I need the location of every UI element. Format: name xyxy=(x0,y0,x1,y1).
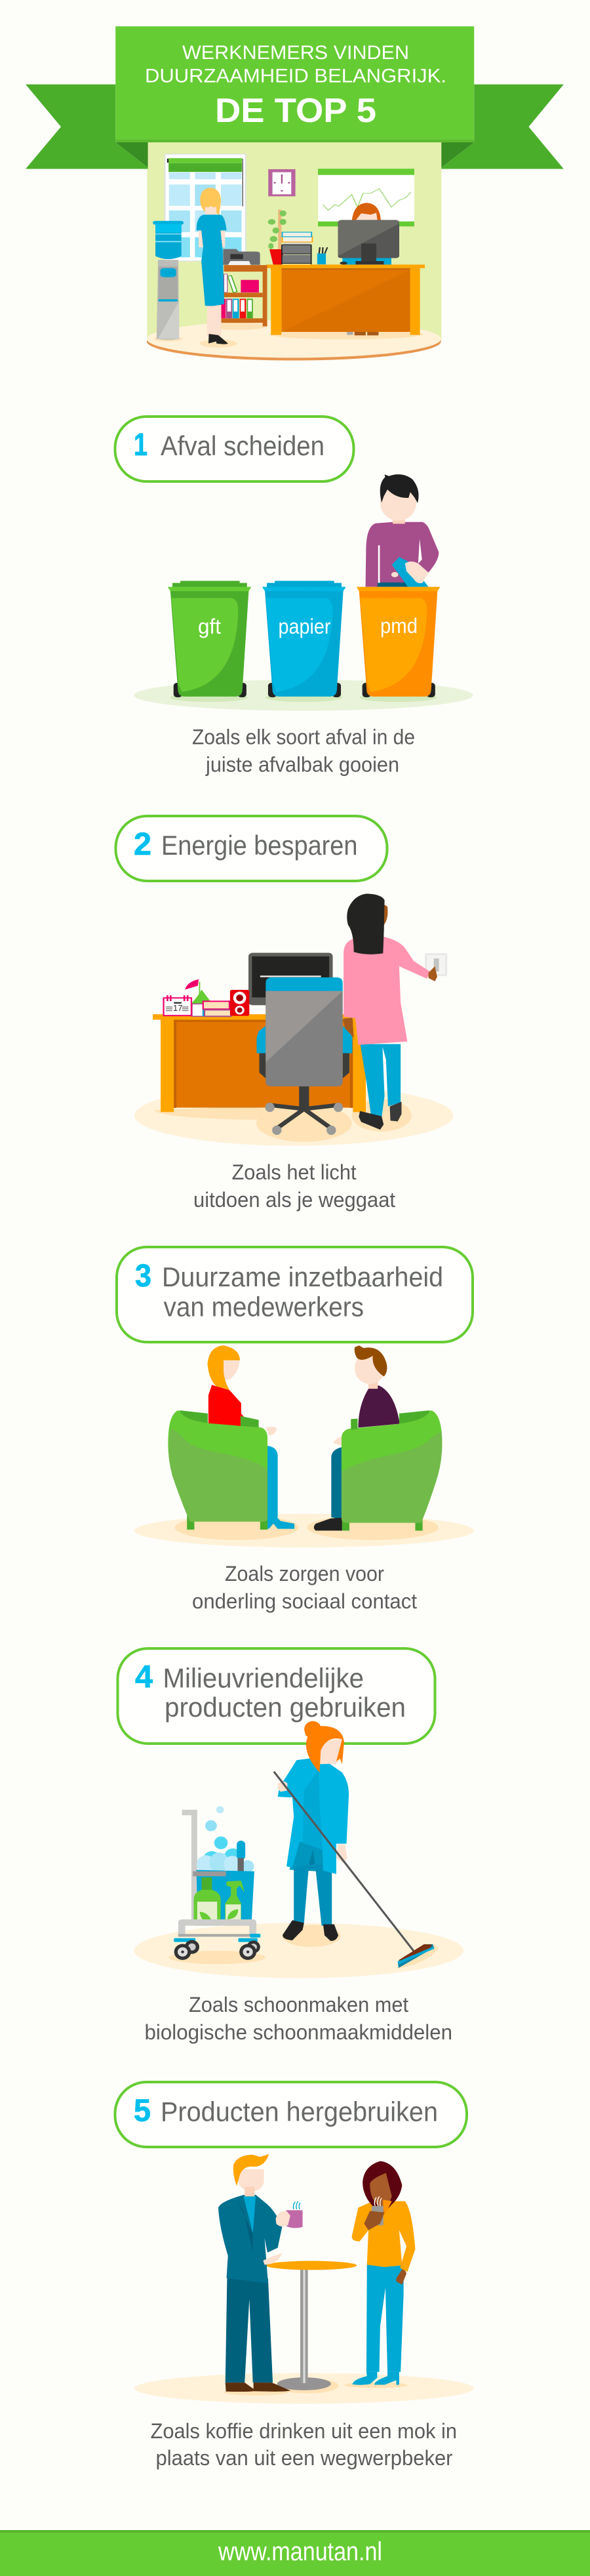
seated employee behind monitor xyxy=(338,203,399,265)
title: DE TOP 5 xyxy=(215,92,376,130)
panel: 4 milieuvriendelijke producten xyxy=(118,1648,463,2044)
printer xyxy=(223,249,260,266)
heading pill: Afval scheiden xyxy=(161,430,324,461)
heading pill: Milieuvriendelijke xyxy=(163,1662,364,1694)
illustration: desk, chair, woman at light switch xyxy=(134,893,453,1146)
pencil cup xyxy=(317,247,327,264)
caption: onderling sociaal contact xyxy=(192,1589,417,1613)
heading pill: Duurzame inzetbaarheid xyxy=(162,1261,443,1292)
desk xyxy=(153,1014,366,1112)
caption xyxy=(192,726,415,777)
caption: juiste afvalbak gooien xyxy=(205,753,399,777)
heading pill xyxy=(115,816,387,881)
caption xyxy=(151,2419,457,2470)
caption xyxy=(144,1993,452,2044)
office scene illustration xyxy=(147,142,441,361)
document tray and books xyxy=(282,232,312,264)
illustration: cleaning cart and woman with broom xyxy=(134,1721,463,1978)
illustration: two people in armchairs xyxy=(134,1345,474,1547)
caption: uitdoen als je weggaat xyxy=(193,1188,395,1212)
bin labels: gft xyxy=(198,615,221,638)
person xyxy=(366,474,439,587)
heading pill: 3 xyxy=(135,1259,151,1294)
panel: 5 producten hergebruiken xyxy=(115,2082,474,2470)
caption: Zoals koffie drinken uit een mok in xyxy=(151,2419,457,2443)
caption: biologische schoonmaakmiddelen xyxy=(144,2020,452,2044)
right armchair xyxy=(342,1410,442,1530)
bin labels xyxy=(198,614,418,638)
woman at light switch xyxy=(343,893,447,1130)
left armchair xyxy=(168,1410,267,1530)
standing woman xyxy=(197,188,228,344)
plant in red pot xyxy=(268,210,286,264)
water cooler xyxy=(153,221,184,340)
heading pill: 1 xyxy=(134,428,148,462)
bin labels: papier xyxy=(278,615,331,638)
caption xyxy=(193,1160,395,1212)
heading pill xyxy=(115,2082,467,2147)
bin: pmd xyxy=(357,587,440,697)
woman with broom xyxy=(274,1721,434,1968)
heading pill: van medewerkers xyxy=(164,1291,364,1322)
caption: Zoals het licht xyxy=(232,1160,357,1184)
man with mug xyxy=(218,2154,303,2392)
title xyxy=(145,42,446,130)
header: banner with office scene xyxy=(26,26,564,361)
footer bar xyxy=(0,2530,590,2576)
illustration: two colleagues with coffee xyxy=(134,2154,474,2403)
man in purple xyxy=(314,1345,400,1530)
panel: 3 duurzame inzetbaarheid xyxy=(117,1247,474,1613)
"17" on calendar: 17 xyxy=(173,1003,182,1013)
wall clock xyxy=(268,169,296,196)
heading pill: 2 xyxy=(134,827,151,862)
title: WERKNEMERS VINDEN xyxy=(182,42,409,64)
caption: Zoals elk soort afval in de xyxy=(192,726,415,749)
footer bar: www.manutan.nl xyxy=(218,2537,382,2566)
caption: Zoals schoonmaken met xyxy=(189,1993,408,2016)
heading pill: Producten hergebruiken xyxy=(161,2096,438,2127)
cleaning cart xyxy=(174,1806,260,1960)
heading pill xyxy=(117,1247,473,1342)
desk items xyxy=(164,979,249,1016)
table xyxy=(266,2261,357,2390)
caption xyxy=(192,1562,417,1613)
title: DUURZAAMHEID BELANGRIJK. xyxy=(145,66,446,87)
heading pill: 5 xyxy=(134,2094,151,2128)
wall chart xyxy=(318,169,414,226)
bookshelf with binders xyxy=(220,265,267,327)
bin: papier xyxy=(262,581,346,697)
desk xyxy=(266,264,425,335)
banner ribbon xyxy=(26,26,564,169)
heading pill xyxy=(118,1648,435,1744)
caption: plaats van uit een wegwerpbeker xyxy=(156,2446,453,2470)
office chair xyxy=(256,977,352,1135)
panel: 1 afval scheiden xyxy=(115,417,473,777)
heading pill: 4 xyxy=(135,1660,153,1695)
heading pill xyxy=(115,417,354,481)
woman with takeaway cup xyxy=(352,2161,415,2385)
illustration: three bins and person xyxy=(134,474,473,711)
heading pill: producten gebruiken xyxy=(165,1692,406,1723)
monitor xyxy=(248,952,333,1005)
woman in red xyxy=(208,1345,294,1529)
bin labels: pmd xyxy=(380,614,418,638)
panel: 2 energie besparen xyxy=(115,816,453,1212)
window with blind xyxy=(164,153,246,262)
bin: gft xyxy=(168,581,251,697)
caption: Zoals zorgen voor xyxy=(225,1562,384,1585)
heading pill: Energie besparen xyxy=(161,830,358,861)
